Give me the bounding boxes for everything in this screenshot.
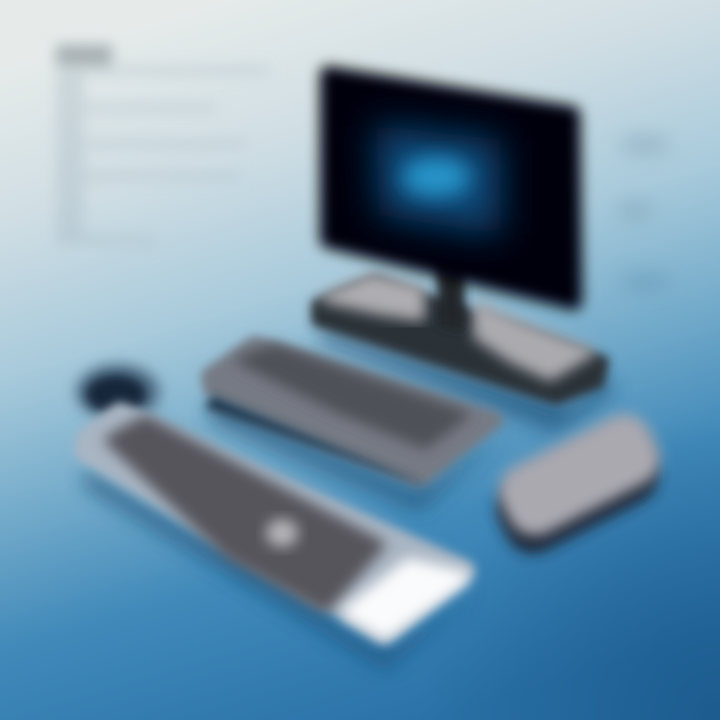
base body (318, 282, 602, 398)
text block: faded right labels (616, 136, 671, 290)
screen glow center (402, 157, 470, 197)
keys (110, 420, 380, 608)
white end (350, 565, 462, 632)
monitor stand neck (436, 240, 466, 332)
panel: faded text block (56, 45, 268, 245)
dial rim (76, 364, 160, 420)
base right top (478, 305, 590, 376)
key highlight (266, 519, 298, 547)
keys (240, 348, 465, 445)
keyboard: front (85, 412, 480, 668)
monitor stand base (318, 278, 612, 425)
mouse device (487, 404, 670, 563)
top (489, 404, 670, 545)
dial centre (86, 375, 146, 413)
screen glow wide (375, 125, 500, 235)
body (85, 412, 465, 634)
heading: faded title (56, 45, 112, 65)
monitor (328, 74, 574, 302)
shadow (85, 470, 480, 668)
text block: faded lines (56, 66, 268, 245)
front lip (205, 395, 430, 488)
screen frame (328, 74, 574, 302)
body (210, 345, 494, 478)
keyboard: middle (205, 345, 505, 510)
dial (76, 364, 160, 420)
shadow (210, 405, 505, 510)
side (487, 422, 668, 563)
base shadow (320, 335, 612, 425)
base left top (326, 278, 420, 316)
